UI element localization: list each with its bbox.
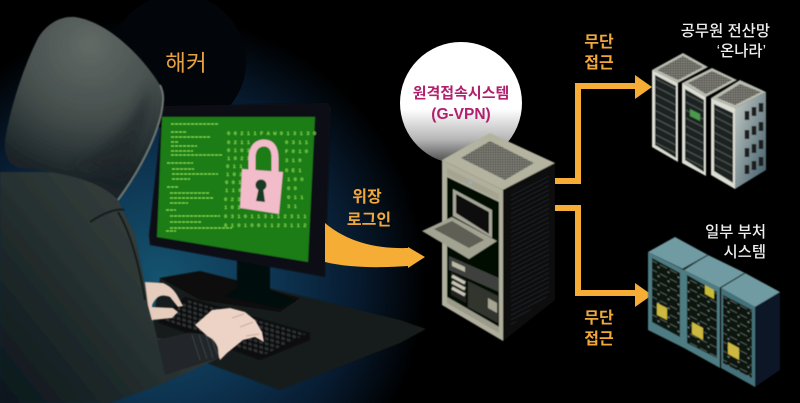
G-VPN circle: [400, 42, 522, 164]
label: unauthorized access lower: [584, 309, 614, 348]
central server rack: [422, 133, 555, 341]
label: disguised login: 로그인: [347, 211, 391, 229]
server 3: [711, 80, 766, 189]
screen code text: 1 0 2: [226, 171, 243, 178]
arm fold line: [90, 210, 145, 300]
screen code text: 0 1 1: [287, 194, 304, 201]
screen code text: 0 0: [287, 185, 297, 192]
background glow: [0, 0, 430, 403]
server 1: [652, 53, 708, 162]
screen code text: 0 E 1: [285, 167, 302, 174]
screen code text: 1 0 2 3: [227, 155, 251, 162]
left hand: [145, 282, 183, 320]
screen code text: 0 0 1: [225, 179, 242, 186]
right hand: [195, 308, 264, 360]
hacker: [0, 17, 264, 403]
rack side: [503, 163, 555, 341]
screen code text: 0 1 0 1 0 0 1 1 2 3 1 1 2: [224, 222, 307, 229]
laptop screen: [453, 189, 492, 238]
screen code text: 0 2 1 1: [227, 139, 251, 146]
label: disguised login: 위장: [352, 188, 382, 206]
hoodie body: [0, 172, 219, 403]
screen code text: 0 1 1: [226, 163, 243, 170]
screen code text: 1 1 0: [225, 187, 242, 194]
hood: [5, 17, 163, 200]
rack top: [442, 133, 555, 190]
label: unauthorized access lower: 접근: [584, 330, 614, 348]
teal server 1: [648, 237, 708, 348]
keyboard: [157, 297, 310, 360]
sleeve cuff: [157, 333, 219, 375]
label: Onnara network: ‘온나라’: [717, 42, 766, 60]
Onnara servers: [652, 53, 766, 189]
arrow: to department systems: [555, 208, 636, 293]
screen code text: 1 0 0: [287, 176, 304, 183]
department servers: [648, 237, 780, 387]
label: hacker: 해커: [165, 51, 207, 76]
screen code text: 3 1 0: [285, 157, 302, 164]
label: unauthorized access lower: 무단: [584, 309, 614, 327]
arrow: to Onnara: [555, 86, 636, 181]
rack lower equipment: [449, 256, 499, 292]
label: disguised login: [347, 188, 391, 229]
hood rim: [118, 85, 163, 200]
monitor screen: [157, 117, 315, 262]
label: unauthorized access upper: 접근: [584, 54, 614, 72]
label: Onnara network: [681, 22, 770, 60]
rack front band: [447, 168, 499, 200]
screen code text: 0 0 2 1 1 F A W 0 1 3 1 3 0: [227, 130, 316, 137]
rack top vent: [461, 141, 534, 180]
G-VPN circle: 원격접속시스템: [413, 85, 509, 102]
screen code text: 0 2 3: [224, 196, 241, 203]
server 2: [682, 68, 737, 176]
label: department systems: [705, 223, 766, 261]
hood inner shade: [75, 85, 149, 180]
computer desk: [150, 271, 426, 390]
monitor frame: [149, 103, 331, 277]
finger lines: [232, 314, 259, 336]
label: Onnara network: 공무원 전산망: [681, 22, 770, 40]
screen code text: [166, 124, 316, 231]
teal server 2: [684, 255, 745, 368]
screen code text: 0 3 1 1: [285, 139, 309, 146]
screen code text: 1 0 1: [224, 204, 241, 211]
monitor stand: [225, 260, 296, 308]
teal server 3: [721, 273, 780, 387]
server gaps: [683, 255, 745, 288]
screen code text: 0 3 1 0 1 1 3 1 1 2 3 1 1: [224, 213, 307, 220]
label: department systems: 일부 부처: [705, 223, 766, 241]
screen code text: 0 1 0 1: [227, 147, 251, 154]
arrowhead: to department systems: [635, 283, 652, 307]
label: unauthorized access upper: [584, 33, 614, 72]
hacker head shadow: [110, 0, 246, 130]
screen code text: 3 1: [287, 203, 298, 210]
G-VPN circle: (G-VPN): [431, 106, 491, 123]
rack front: [442, 160, 503, 341]
arrowhead: to Onnara: [635, 75, 652, 99]
label: unauthorized access upper: 무단: [584, 33, 614, 51]
screen code text: F 0 1 0: [285, 148, 308, 155]
padlock icon: [240, 143, 283, 214]
computer monitor: [149, 103, 331, 308]
laptop keyboard tray: [422, 217, 497, 259]
arrow: disguised login curve: [325, 223, 425, 268]
label: department systems: 시스템: [724, 243, 766, 261]
